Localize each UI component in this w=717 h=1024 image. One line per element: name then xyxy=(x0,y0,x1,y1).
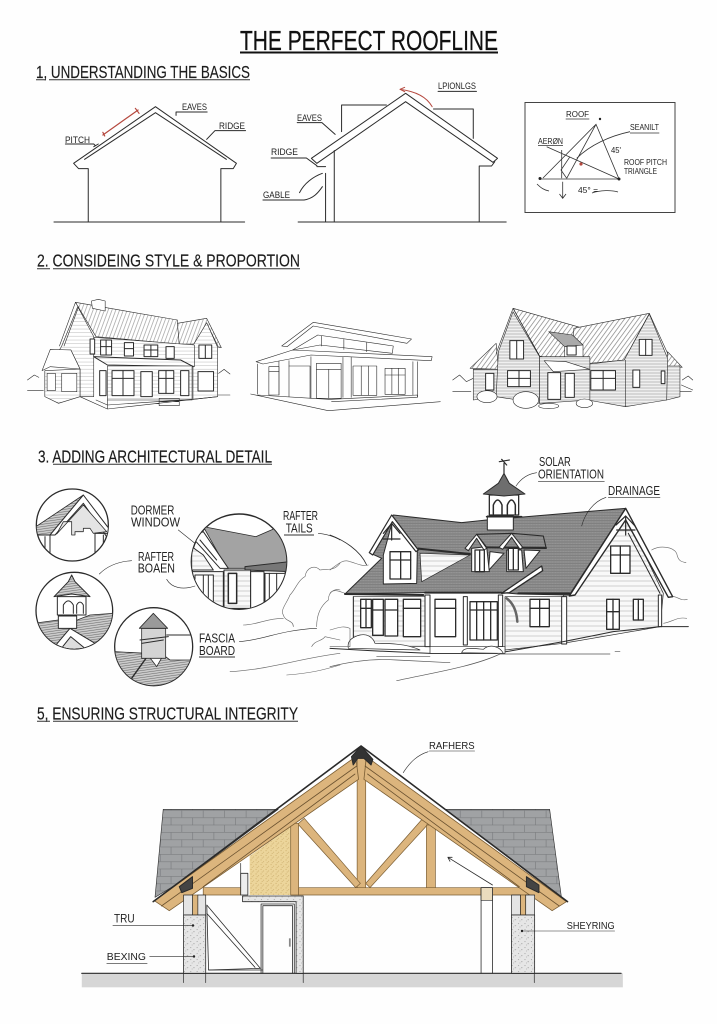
diagram: gable house with eaves, ridge and gable labels: RIDGE xyxy=(271,147,298,158)
detail circle: cupola on ridge xyxy=(33,572,113,653)
diagram: roof pitch triangle box: ROOF PITCH xyxy=(624,157,667,167)
ground slab xyxy=(82,973,623,987)
walls and columns xyxy=(184,895,192,915)
illustration: main house with cupola and dormers xyxy=(330,459,688,681)
diagram: roof pitch triangle box: 45° = xyxy=(578,185,598,195)
cupola xyxy=(487,516,513,530)
diagram: roof truss cross-section xyxy=(82,746,623,987)
diagram: basic house with pitch, eaves and ridge: RIDGE xyxy=(219,121,245,132)
labels and leaders: truss: SHEYRING xyxy=(567,920,615,932)
roof covering line xyxy=(153,746,567,902)
diagram: basic house with pitch, eaves and ridge: PITCH xyxy=(65,135,90,146)
roof mass xyxy=(345,508,626,595)
diagram: roof pitch triangle box: AERØN xyxy=(538,136,563,146)
diagram: roof pitch triangle box: ROOF xyxy=(566,109,589,119)
ground and shrubs xyxy=(330,627,688,653)
rafters xyxy=(154,757,359,911)
illustration: modern flat-roof house xyxy=(251,322,440,411)
diagram: gable house with eaves, ridge and gable labels: EAVES xyxy=(297,113,322,124)
labels and leaders: detail circles: BOARD xyxy=(199,644,235,658)
diagram: gable house with eaves, ridge and gable labels: GABLE xyxy=(263,190,290,201)
labels and leaders: main house: DRAINAGE xyxy=(608,484,660,498)
door xyxy=(261,904,294,973)
labels and leaders: truss: TRU xyxy=(114,911,135,925)
tie beam and web members xyxy=(192,758,534,915)
diagram: roof pitch triangle box: 45' xyxy=(611,145,621,155)
roof shingles xyxy=(155,809,278,897)
title: THE PERFECT ROOFLINE xyxy=(240,25,498,56)
labels and leaders: truss: RAFHERS xyxy=(429,740,475,752)
labels and leaders: main house xyxy=(516,455,660,526)
labels and leaders: detail circles: TAILS xyxy=(286,522,313,536)
labels and leaders: detail circles: DORMER xyxy=(131,504,174,518)
diagram: roof pitch triangle box: SEANILT xyxy=(630,122,659,132)
diagonal brace xyxy=(207,905,260,970)
labels and leaders: detail circles: RAFTER xyxy=(283,509,318,523)
illustration: traditional two-storey house xyxy=(27,299,230,409)
diagram: gable house with eaves, ridge and gable labels: LPIONLGS xyxy=(438,81,476,92)
labels and leaders: detail circles: RAFTER xyxy=(138,550,174,564)
heading: section 1: 1, UNDERSTANDING THE BASICS xyxy=(36,62,250,82)
labels and leaders: detail circles: WINDOW xyxy=(131,516,180,530)
labels and leaders: main house: SOLAR xyxy=(539,455,571,469)
heading: section 2: 2. CONSIDEING STYLE & PROPORTION xyxy=(37,250,300,270)
labels and leaders: detail circles: FASCIA xyxy=(199,631,236,645)
insulation panel xyxy=(250,827,291,895)
arrow xyxy=(448,857,492,885)
illustration: steep gabled house xyxy=(453,308,693,409)
white truss interior xyxy=(184,770,537,895)
labels and leaders: detail circles: BOAEN xyxy=(138,562,175,576)
labels and leaders: main house: ORIENTATION xyxy=(538,467,604,481)
main house walls xyxy=(353,595,663,650)
diagram: gable house with eaves, ridge and gable labels xyxy=(263,81,506,222)
diagram: roof pitch triangle box xyxy=(525,102,675,212)
labels and leaders: truss xyxy=(107,740,615,963)
detail circle: cupola with shingles xyxy=(115,608,193,687)
post xyxy=(481,888,492,973)
windows xyxy=(361,546,643,640)
illustration: landscape behind main house xyxy=(230,563,340,675)
labels and leaders: truss: BEXING xyxy=(107,951,146,963)
detail circle: dormer window xyxy=(191,514,290,610)
heading: section 3: 3. ADDING ARCHITECTURAL DETAIL xyxy=(38,446,272,466)
diagram: basic house with pitch, eaves and ridge: EAVES xyxy=(182,102,207,113)
posts xyxy=(353,595,662,647)
diagram: roof pitch triangle box: TRIANGLE xyxy=(624,166,657,176)
detail circle: gable bracket xyxy=(33,489,110,561)
labels and leaders: detail circles xyxy=(99,504,340,658)
heading: section 5: 5, ENSURING STRUCTURAL INTEGRITY xyxy=(37,703,298,723)
diagram: basic house with pitch, eaves and ridge xyxy=(54,102,246,222)
